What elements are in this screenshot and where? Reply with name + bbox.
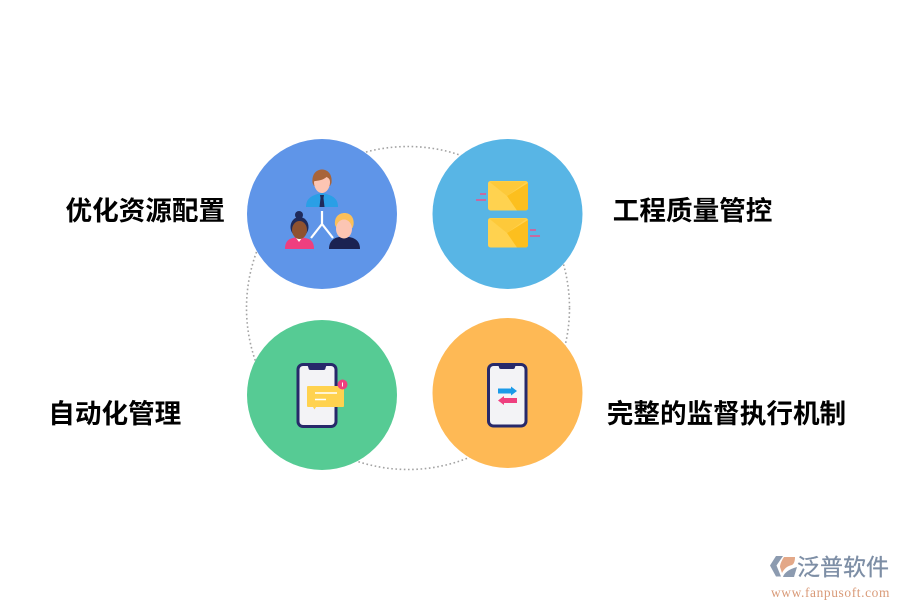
logo mark [770, 556, 797, 577]
icon: phone with transfer arrows [488, 363, 526, 426]
icon: team hierarchy [285, 170, 360, 249]
label: bottom left: 自动化管理 [48, 399, 181, 429]
circle: blue team [247, 139, 397, 289]
logo: Fanpu software [770, 554, 890, 600]
logo name: 泛普软件 [797, 554, 889, 580]
logo url: www.fanpusoft.com [771, 585, 890, 600]
label: top right: 工程质量管控 [613, 196, 772, 226]
dotted ring [246, 146, 570, 470]
circle: orange phone [432, 318, 582, 468]
circle: green phone [247, 320, 397, 470]
label: top left: 优化资源配置 [66, 196, 225, 226]
icon: envelopes [476, 181, 540, 248]
circle: sky blue mail [432, 139, 582, 289]
label: bottom right: 完整的监督执行机制 [607, 399, 846, 429]
icon: phone with message [298, 364, 348, 426]
